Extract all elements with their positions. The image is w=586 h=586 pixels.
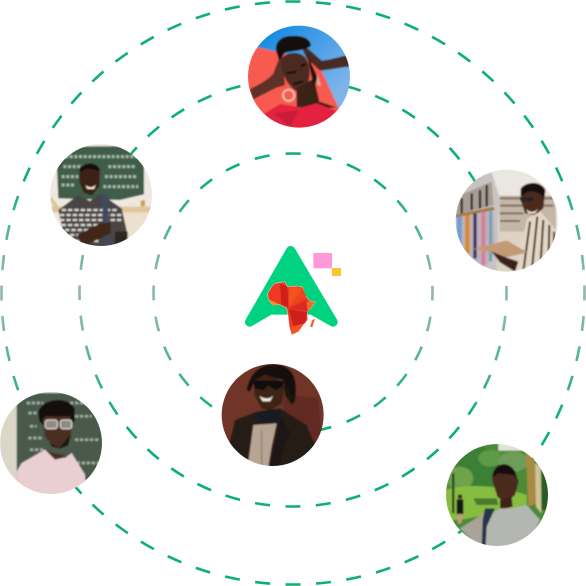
photo: smiling man at chalkboard with backpack — [48, 142, 155, 248]
orbit ring: inner — [154, 154, 432, 432]
orbit ring: middle — [80, 80, 506, 506]
photo: man with glasses in front of equations — [0, 391, 107, 498]
logo: pink square — [313, 253, 332, 268]
photo: young man outdoors on a park path — [446, 444, 548, 546]
logo: map of Africa — [268, 282, 316, 335]
photo: woman against red and blue background — [248, 26, 350, 128]
photo: man reading a book in a library — [456, 170, 558, 272]
photo: man with dreadlocks and sunglasses in blazer — [220, 362, 327, 470]
central logo — [250, 251, 341, 335]
logo: yellow square — [332, 268, 341, 276]
logo: green arrow — [250, 251, 333, 322]
